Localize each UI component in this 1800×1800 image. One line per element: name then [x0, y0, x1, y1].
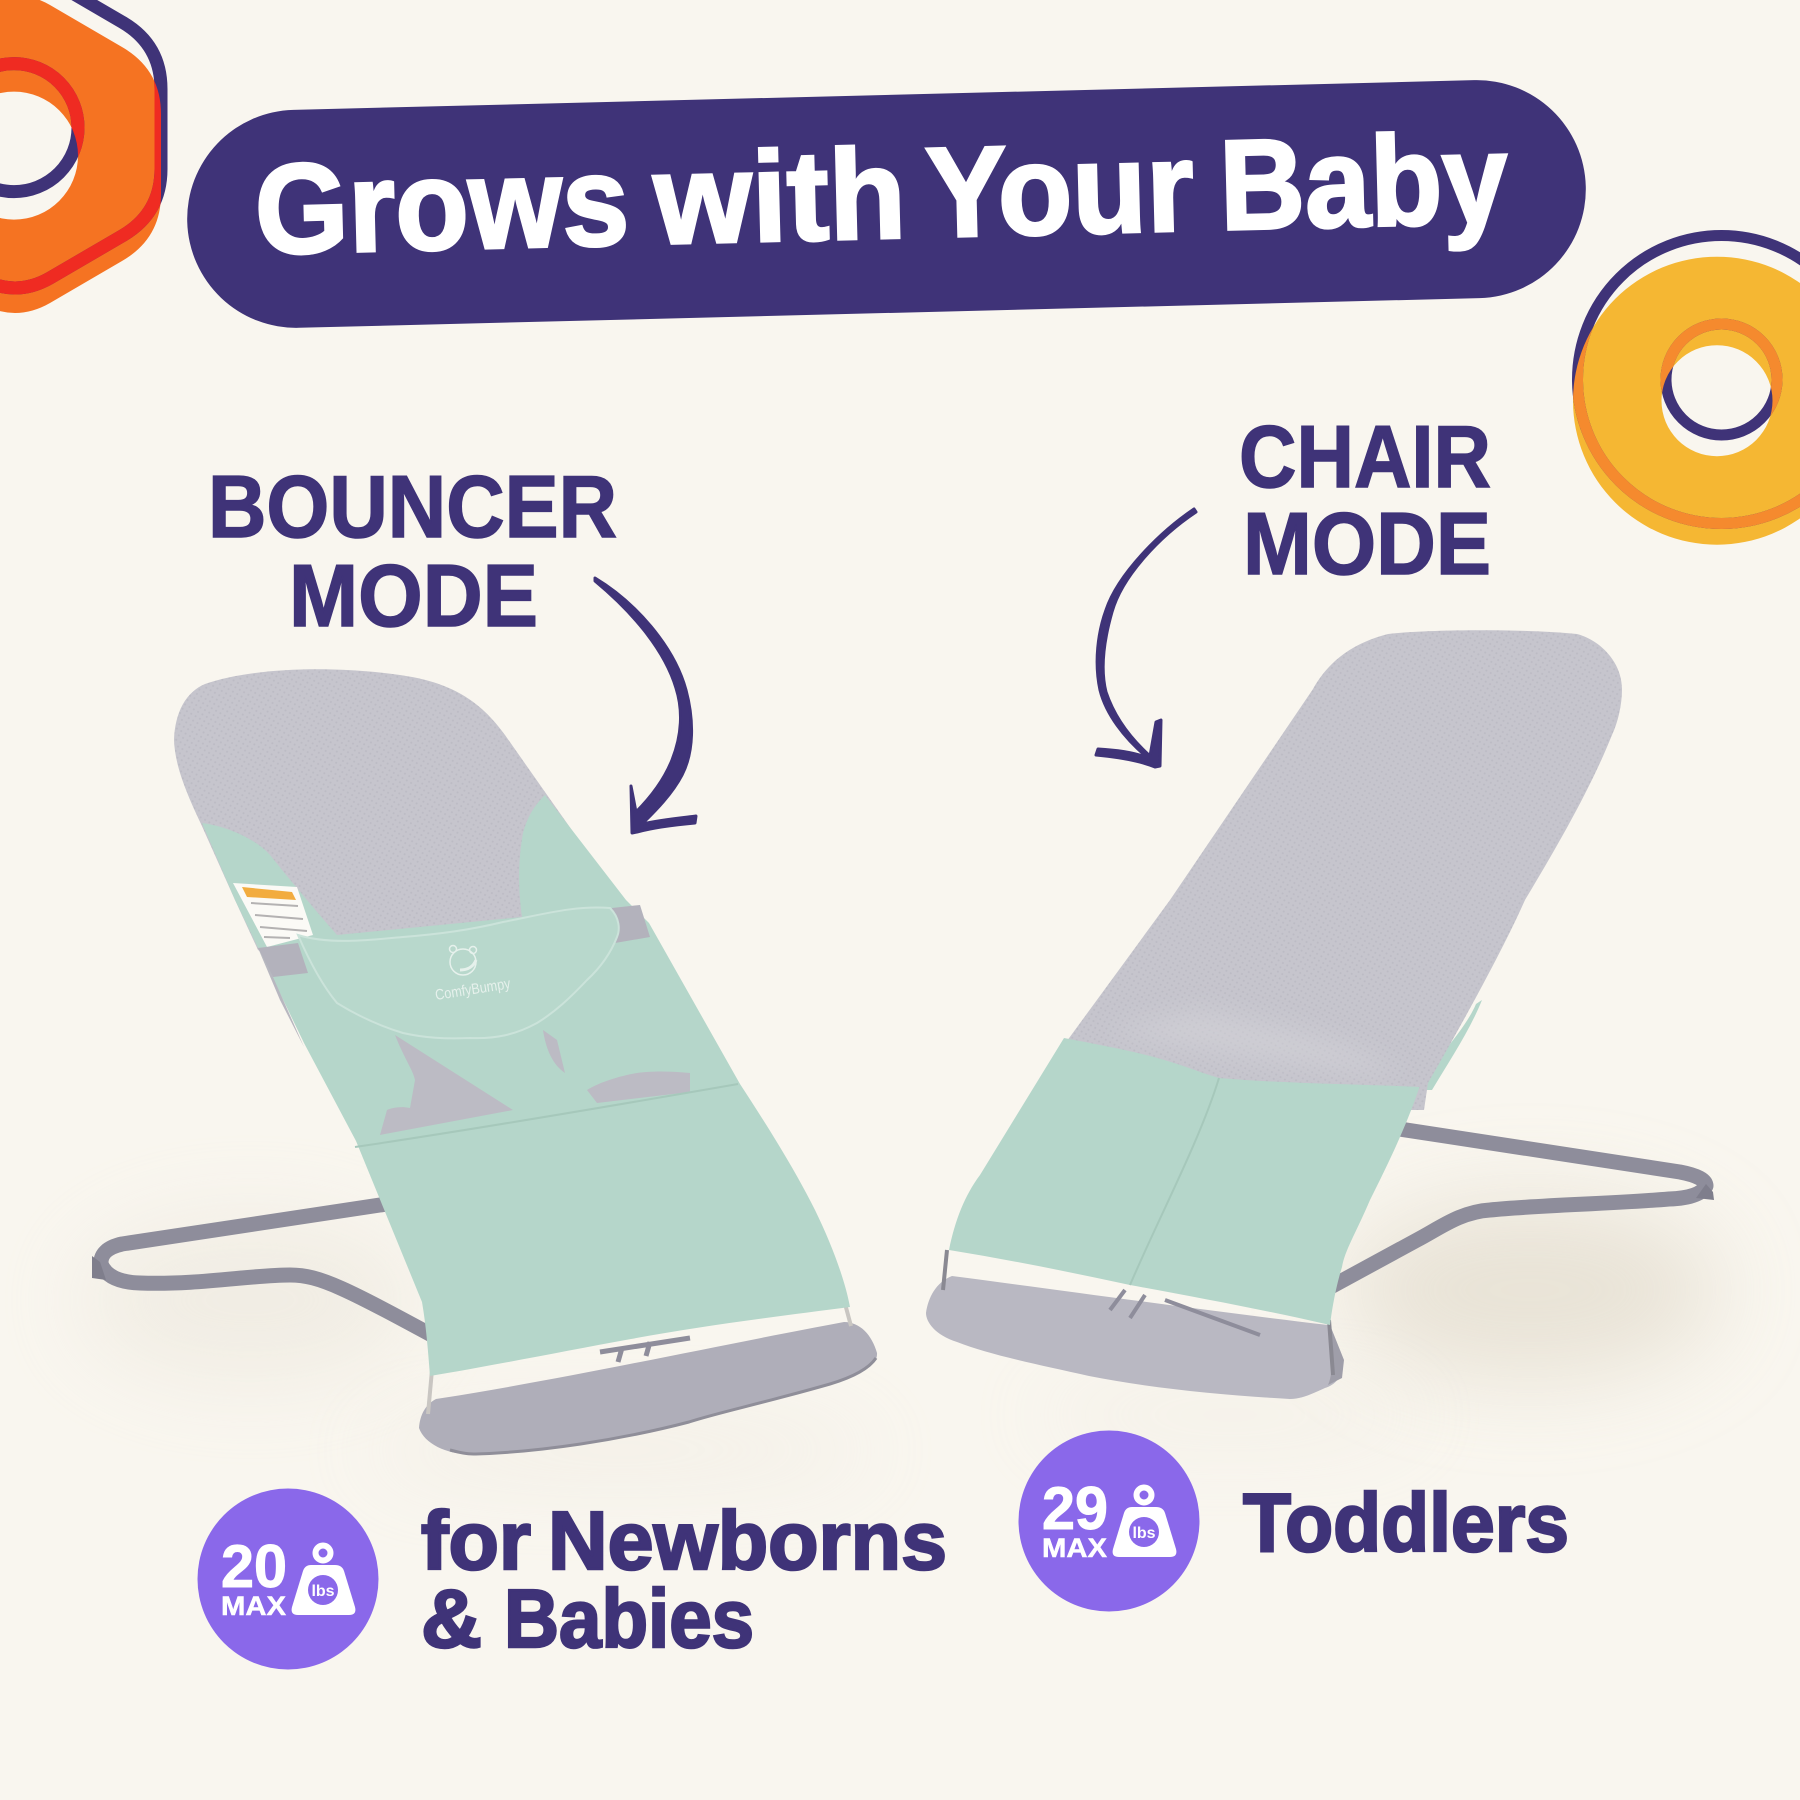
- caption: newborns and babies: &: [421, 1572, 482, 1665]
- weight value: 29: [1042, 1475, 1108, 1542]
- chair base: [926, 1276, 1342, 1399]
- label: bouncer mode: BOUNCER: [208, 457, 617, 556]
- decorative orange hexagon: [0, 0, 161, 313]
- chair metal posts: [943, 1250, 1333, 1375]
- chair mesh seat: [1064, 630, 1622, 1110]
- floor shadows: [80, 1200, 1720, 1475]
- chair base shadow edge: [1328, 1325, 1344, 1385]
- arrow: to chair: [1096, 509, 1196, 767]
- label: chair mode: [1239, 407, 1491, 593]
- bouncer leg opening mesh: [380, 1030, 690, 1135]
- bouncer frame: [101, 1202, 450, 1345]
- label: bouncer mode: [208, 457, 617, 645]
- caption: newborns and babies: for: [421, 1494, 531, 1587]
- label: bouncer mode: MODE: [289, 546, 538, 645]
- bouncer metal posts: [428, 1300, 851, 1414]
- chair mesh shading: [1110, 1010, 1400, 1075]
- chair green fabric: [949, 1038, 1420, 1325]
- bouncer struts: [600, 1338, 690, 1362]
- icon unit: lbs: [1132, 1525, 1156, 1542]
- icon: weight: [292, 1546, 355, 1615]
- product: chair mode: [926, 630, 1714, 1399]
- chair frame: [1325, 1126, 1706, 1290]
- title: Baby: [1218, 107, 1509, 258]
- chair fabric seam: [1130, 1078, 1219, 1285]
- warning label: [233, 883, 313, 947]
- title: Your: [924, 115, 1195, 265]
- bouncer base: [419, 1322, 877, 1454]
- title banner: [184, 77, 1589, 331]
- max label: MAX: [221, 1591, 286, 1621]
- icon: weight: [1113, 1488, 1176, 1557]
- weight value: 20: [221, 1533, 287, 1600]
- product: bouncer mode: [92, 669, 877, 1454]
- caption: newborns and babies: Babies: [504, 1572, 754, 1665]
- bouncer side mesh edge: [258, 948, 304, 1047]
- arrow: to bouncer: [595, 578, 696, 833]
- warning label header: [242, 887, 296, 900]
- max label: MAX: [1042, 1533, 1107, 1563]
- title: Grows: [253, 129, 631, 282]
- harness straps: [258, 905, 650, 977]
- title: with: [651, 123, 908, 272]
- badge: 20 lbs max: [198, 1488, 378, 1670]
- caption: toddlers: Toddlers: [1243, 1476, 1569, 1569]
- caption: newborns and babies: Newborns: [548, 1494, 947, 1587]
- bouncer green fabric: [202, 795, 850, 1376]
- caption: newborns and babies: [421, 1494, 947, 1665]
- decorative yellow donut: [1573, 236, 1800, 545]
- bouncer frame foot: [92, 1256, 106, 1280]
- label: chair mode: CHAIR: [1239, 407, 1491, 506]
- bouncer mesh headrest: [174, 669, 600, 1000]
- label: chair mode: MODE: [1243, 494, 1491, 593]
- title: [253, 107, 1509, 282]
- chair side green sliver: [1415, 1000, 1482, 1090]
- bouncer base lower edge: [450, 1358, 876, 1454]
- icon unit: lbs: [311, 1583, 335, 1600]
- badge: 29 lbs max: [1018, 1430, 1200, 1612]
- brand name: ComfyBumpy: [434, 975, 512, 1004]
- bouncer pocket seam: [355, 1084, 738, 1147]
- bear icon: [450, 946, 476, 975]
- chair frame foot: [1696, 1184, 1714, 1200]
- chair under-seat struts: [1110, 1290, 1260, 1335]
- brand logo: [434, 946, 512, 1004]
- headrest cushion: [298, 907, 619, 1038]
